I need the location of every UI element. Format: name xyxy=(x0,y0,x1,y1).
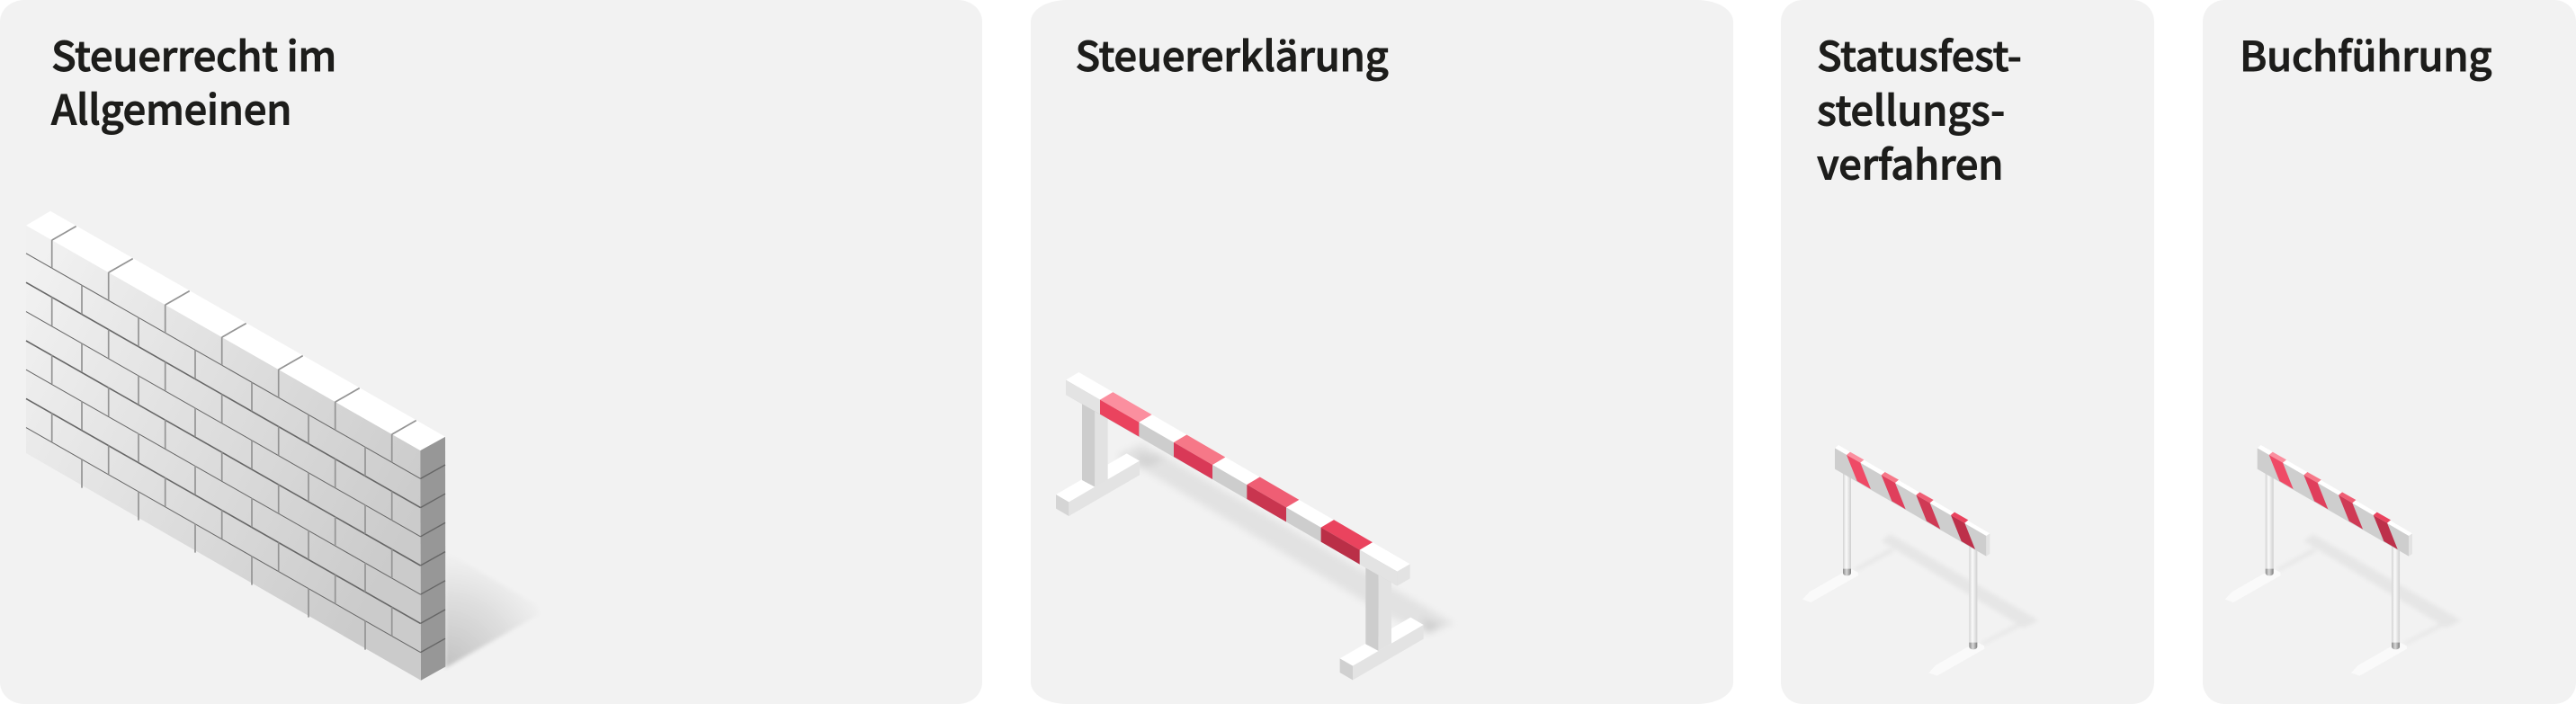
panel: Steuerrecht im Allgemeinen xyxy=(0,0,982,704)
beam red segments xyxy=(1100,392,1373,565)
beam xyxy=(1066,372,1410,586)
panel: Steuererklärung xyxy=(1031,0,1733,704)
wall side face xyxy=(420,437,445,681)
panel background xyxy=(0,0,982,704)
left leg xyxy=(1082,402,1108,487)
beam shadow xyxy=(1118,443,1454,634)
wall shadow xyxy=(445,551,540,668)
heading: Steuererklärung xyxy=(1076,24,1389,84)
heading: stellungs- xyxy=(1817,79,2005,138)
board xyxy=(2258,445,2412,557)
icon: brick wall xyxy=(26,211,540,681)
left foot xyxy=(2225,569,2281,602)
left post xyxy=(1843,468,1851,575)
panel: Statusfeststellungsverfahren xyxy=(1781,0,2154,704)
heading: Statusfest- xyxy=(1817,24,2022,84)
left foot xyxy=(1802,569,1858,602)
board red stripes xyxy=(1847,452,1975,549)
right foot xyxy=(1928,643,1984,676)
barrier shadow xyxy=(1855,534,2039,646)
icon: barrier xyxy=(2225,445,2461,676)
brick joints xyxy=(52,239,392,650)
panel background xyxy=(2203,0,2576,704)
icon: hurdle beam xyxy=(1056,372,1454,680)
brick courses xyxy=(26,254,445,653)
icon: barrier xyxy=(1802,445,2039,676)
right foot xyxy=(2351,643,2407,676)
left foot xyxy=(1056,453,1140,516)
wall front face xyxy=(26,226,421,681)
heading: Buchführung xyxy=(2240,24,2491,84)
panel background xyxy=(1781,0,2154,704)
board xyxy=(1835,445,1990,557)
right leg xyxy=(1365,566,1391,651)
heading: verfahren xyxy=(1817,133,2003,192)
heading: Steuerrecht im xyxy=(51,24,336,84)
barrier shadow xyxy=(2276,534,2461,646)
right foot xyxy=(1340,618,1424,680)
right post xyxy=(1969,542,1977,649)
heading: Allgemeinen xyxy=(51,77,291,137)
left post xyxy=(2266,468,2274,575)
panel background xyxy=(1031,0,1733,704)
panel: Buchführung xyxy=(2203,0,2576,704)
top joints xyxy=(52,227,416,434)
wall top face xyxy=(26,211,445,450)
right post xyxy=(2392,542,2400,649)
board red stripes xyxy=(2269,452,2398,549)
